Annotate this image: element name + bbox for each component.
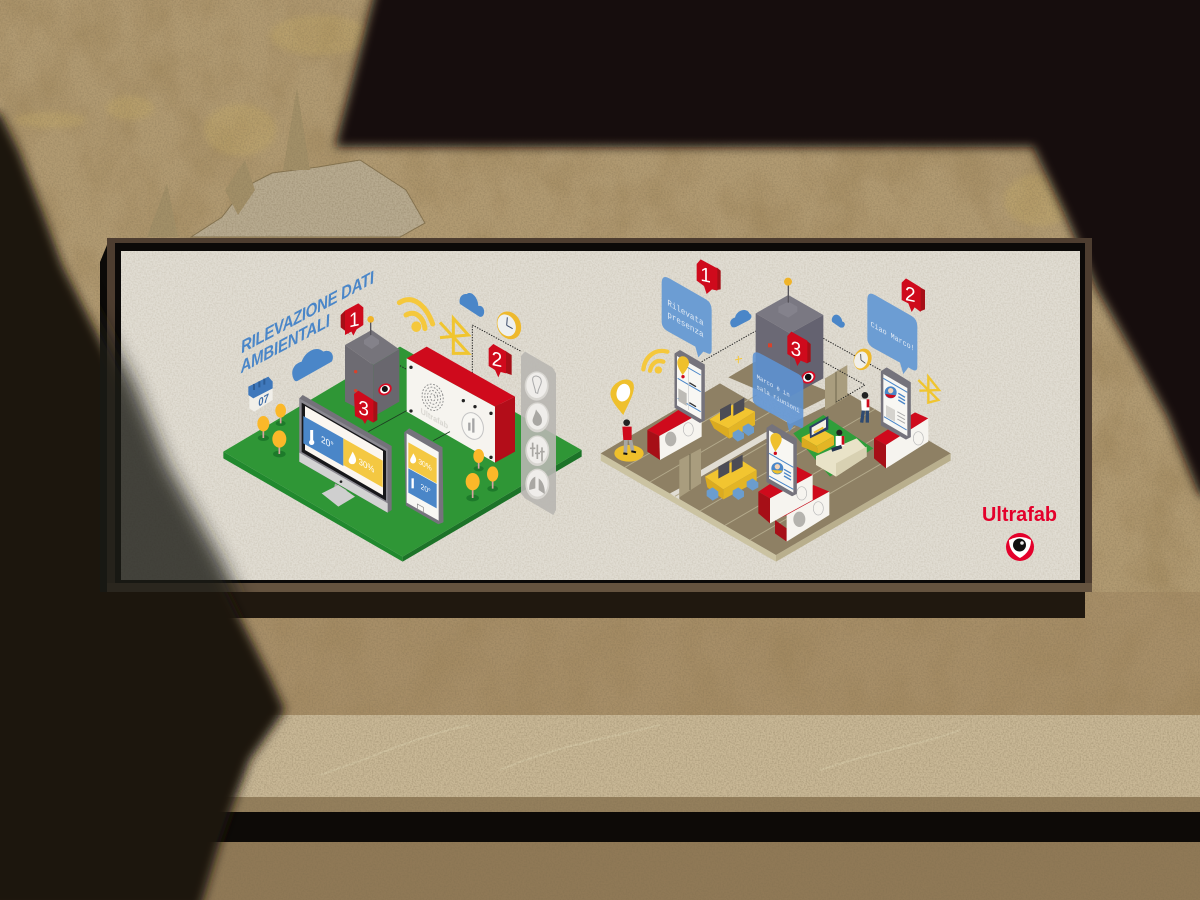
badge 1: 1 — [700, 263, 711, 288]
icon: map pin large — [610, 380, 634, 415]
icon: wifi — [399, 300, 433, 332]
illustration: environmental data — [223, 267, 582, 562]
tower logo — [376, 381, 394, 398]
icon: calendar — [248, 377, 273, 412]
walking person — [861, 392, 869, 423]
trees — [257, 404, 498, 501]
icon: cloud left — [292, 349, 333, 381]
sofa — [816, 438, 867, 477]
dotted connector — [388, 325, 522, 405]
side panel with icons — [521, 352, 556, 515]
meeting table and screen — [802, 416, 834, 453]
monitor temperature card: 20° — [321, 434, 334, 452]
badge 3 — [787, 332, 811, 366]
person with presence marker — [614, 419, 644, 462]
phone — [405, 429, 443, 523]
desk upper — [709, 398, 755, 442]
icon: calendar: 07 — [258, 391, 270, 410]
desk lower — [705, 455, 758, 501]
phone temperature card: 20° — [421, 482, 431, 496]
sensor dial — [458, 410, 487, 442]
badge 2 — [489, 344, 512, 377]
icon: flame — [525, 402, 549, 432]
badge 1 — [697, 259, 721, 294]
speech bubble 1 — [662, 277, 712, 357]
icon: clock — [851, 346, 875, 373]
icon: sliders — [525, 435, 549, 466]
dotted connectors — [702, 331, 883, 402]
poster paper — [121, 251, 1080, 580]
poster frame — [107, 238, 1092, 592]
speaker grille — [419, 382, 446, 413]
device front rear — [775, 485, 829, 542]
monitor humidity card: 30% — [359, 456, 374, 475]
icon: cloud right — [460, 293, 484, 317]
icon: bluetooth — [440, 318, 468, 353]
phone pin — [677, 356, 689, 378]
badge 3 — [354, 391, 377, 424]
badge 3: 3 — [791, 337, 801, 362]
badge 2: 2 — [905, 283, 916, 307]
icon: cloud right — [832, 315, 845, 328]
phone right — [882, 368, 910, 439]
speech bubble 3: sala riunioni — [757, 383, 800, 415]
speech bubble 1: Rilevata — [667, 298, 703, 329]
device — [407, 347, 515, 463]
brand logo — [1006, 533, 1034, 561]
tower logo — [799, 369, 818, 386]
green platform — [223, 347, 582, 562]
seated person — [832, 430, 844, 450]
badge 3: 3 — [358, 397, 369, 421]
icon: sparkle — [735, 356, 742, 363]
green rug — [793, 415, 873, 477]
tower — [756, 278, 823, 397]
device front — [758, 467, 813, 523]
badge 1 — [341, 303, 363, 336]
icon: cloud left — [730, 310, 751, 327]
device: Ultrafab — [421, 405, 448, 431]
icon: clock — [492, 307, 526, 343]
phone front — [767, 425, 796, 495]
icon: bulb — [525, 371, 549, 401]
device right — [874, 412, 928, 468]
speech bubble 3 — [753, 352, 803, 432]
badge 2 — [902, 278, 925, 312]
phone left — [675, 351, 704, 422]
device left — [647, 410, 702, 460]
badge 1: 1 — [349, 308, 360, 332]
speech bubble 3: Marco è in — [757, 373, 790, 399]
icon: wifi — [643, 351, 667, 374]
front door — [679, 448, 701, 497]
phone humidity card: 30% — [418, 456, 432, 473]
speech bubble 2 — [867, 294, 917, 374]
speech bubble 1: presenza — [667, 310, 703, 340]
brand wordmark: Ultrafab — [982, 504, 1057, 526]
illustration: presence detection — [601, 259, 951, 562]
title: AMBIENTALI — [238, 310, 332, 378]
thin connector lines — [368, 411, 450, 441]
tower — [345, 316, 399, 417]
monitor — [299, 395, 392, 513]
back door — [825, 365, 847, 410]
icon: bluetooth — [918, 377, 939, 403]
title: RILEVAZIONE DATI — [240, 267, 376, 357]
speech bubble 2: Ciao Marco! — [871, 321, 915, 354]
badge 2: 2 — [492, 348, 502, 372]
poster shadow — [100, 313, 248, 592]
wooden floor — [601, 362, 951, 562]
icon: lungs — [525, 469, 549, 499]
